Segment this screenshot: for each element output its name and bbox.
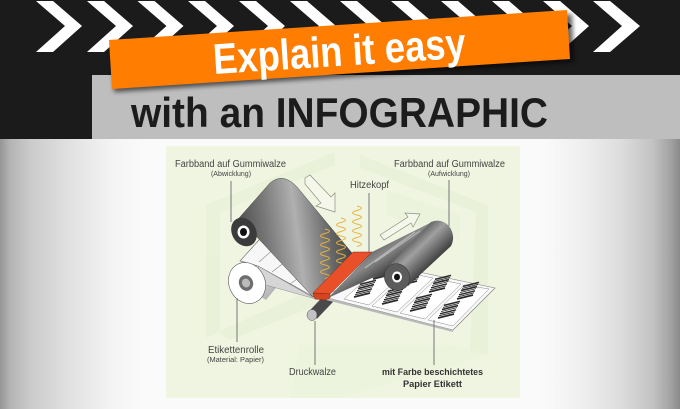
label: supply ribbon: Farbband auf Gummiwalze: [175, 159, 286, 170]
label: supply ribbon: (Abwicklung): [211, 171, 251, 178]
label: take-up ribbon: [394, 159, 505, 178]
label: take-up ribbon: (Aufwicklung): [428, 171, 470, 178]
arrow: ribbon direction in: [305, 175, 335, 212]
printed label sheet: [320, 262, 495, 332]
take-up roller: [380, 221, 453, 295]
heat waves: [320, 206, 362, 278]
white chevrons row: [36, 1, 640, 52]
title: Explain it easy: Explain it easy: [212, 20, 467, 84]
arrow: ribbon direction out: [380, 213, 420, 240]
label: coated paper label: Papier Etikett: [403, 379, 463, 390]
used ribbon to take-up roller: [328, 222, 445, 298]
label roll and paper strip: [222, 239, 316, 310]
supply roller end: [226, 213, 262, 251]
label: supply ribbon: [175, 159, 286, 178]
grey subtitle band: [92, 75, 680, 139]
label: Etikettenrolle: (Material: Papier): [207, 357, 264, 364]
subtitle: with an INFOGRAPHIC: with an INFOGRAPHIC: [130, 89, 548, 136]
orange banner shadow: [112, 14, 574, 92]
label: coated paper label: [382, 367, 483, 390]
press roller: [307, 295, 332, 320]
label: coated paper label: mit Farbe beschichtetes: [382, 367, 483, 378]
orange title banner: [109, 10, 570, 89]
barcodes: [438, 301, 460, 318]
label: take-up ribbon: Farbband auf Gummiwalze: [394, 159, 505, 170]
ink ribbon supply band: [226, 178, 352, 297]
label: Etikettenrolle: [207, 345, 264, 364]
leader lines: [231, 180, 449, 365]
label: Etikettenrolle: Etikettenrolle: [208, 345, 264, 356]
heat head: [313, 252, 372, 300]
faint hexagon background: [206, 152, 488, 398]
label: Druckwalze: Druckwalze: [289, 367, 336, 378]
label: Hitzekopf: Hitzekopf: [350, 180, 389, 191]
clapperboard black header: [0, 0, 680, 139]
sheet label outlines: [344, 267, 489, 326]
icon: label roll end: [222, 256, 272, 310]
panel background: [166, 146, 520, 398]
page background gradient: [0, 139, 680, 409]
panel: thermal transfer printing diagram: [166, 146, 520, 398]
